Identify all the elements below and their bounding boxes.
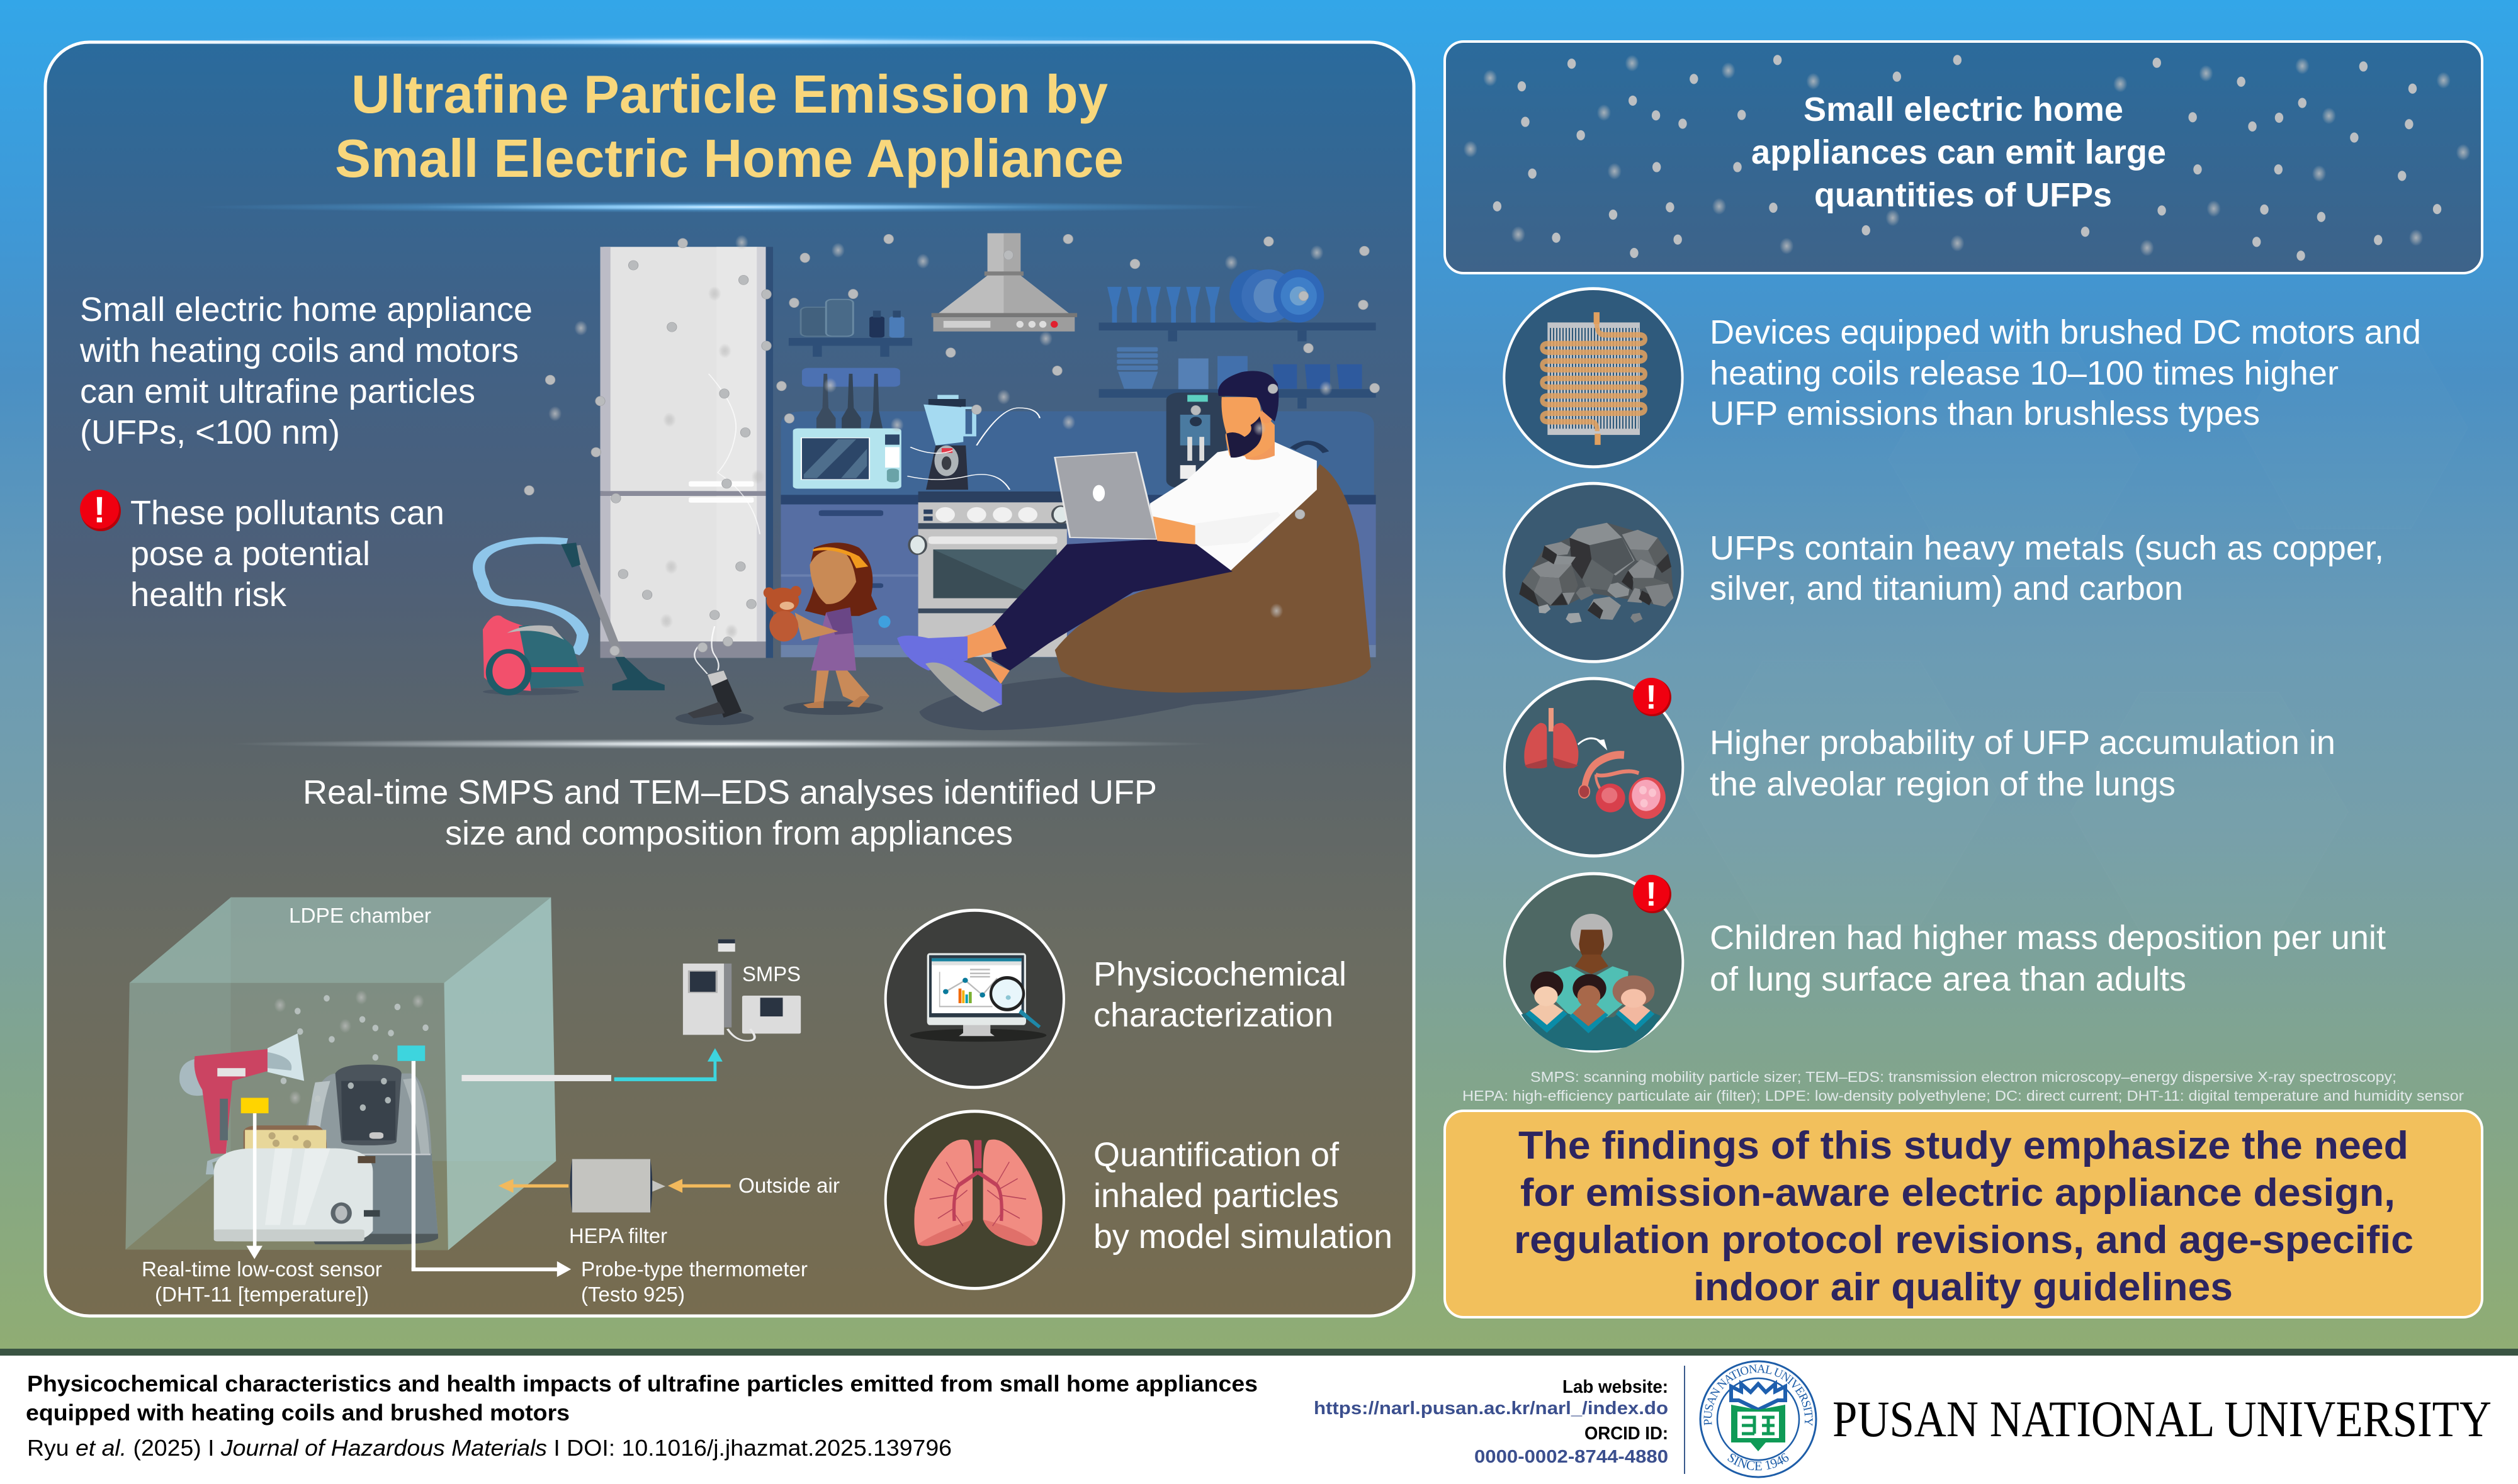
footnote: abbreviations (1462, 1069, 2464, 1104)
footer divider (1684, 1366, 1685, 1474)
stove and oven (909, 492, 1070, 657)
airflow arrows (499, 1179, 731, 1193)
fridge (600, 247, 773, 658)
text block: heavy metals: silver, and titanium) and carbon (1710, 570, 2183, 607)
text block: alveolar accumulation: Higher probability of UFP accumulation in (1710, 724, 2335, 762)
lab links: https://narl.pusan.ac.kr/narl_/index.do (1314, 1398, 1668, 1419)
text block: children deposition: of lung surface area than adults (1710, 960, 2186, 998)
vacuum cleaner (479, 541, 665, 695)
text block: alveolar accumulation: the alveolar region of the lungs (1710, 765, 2176, 803)
text block: heavy metals: UFPs contain heavy metals (such as copper, (1710, 529, 2384, 567)
chamber back and floor (125, 897, 556, 1251)
label: SMPS: SMPS (742, 962, 801, 986)
label: HEPA filter: HEPA filter (569, 1224, 667, 1247)
coffee machine (1166, 393, 1326, 488)
icon: warning on alveolar (1633, 678, 1671, 716)
man on bean bag (897, 371, 1371, 730)
toaster (214, 1149, 380, 1241)
label: LDPE chamber: LDPE chamber (289, 904, 431, 927)
title (335, 65, 1124, 189)
text block: physicochemical characterization: characterization (1093, 996, 1333, 1034)
icon: alveolar lungs (1505, 678, 1683, 856)
icon: children and adults (1505, 874, 1683, 1051)
callout: study findings: regulation protocol revisions, and age-specific (1514, 1218, 2414, 1262)
lab links: ORCID ID: (1584, 1424, 1668, 1444)
panel: small electric home appliances header (1445, 42, 2482, 273)
text block: health risk (130, 494, 444, 614)
text block: appliance description (79, 291, 533, 451)
citation: equipped with heating coils and brushed motors (26, 1400, 570, 1425)
icon: warning (80, 490, 121, 531)
text block: quantification (1093, 1136, 1392, 1256)
text block: appliance description: can emit ultrafine particles (80, 373, 475, 410)
text block: alveolar accumulation (1710, 724, 2335, 803)
icon: heating coil (1504, 289, 1683, 467)
icon: lungs (886, 1111, 1064, 1288)
wine glasses (1107, 287, 1220, 323)
text block: quantification: Quantification of (1093, 1136, 1340, 1174)
footnote: abbreviations: SMPS: scanning mobility particle sizer; TEM–EDS: transmission electron microscopy–energy dispersive X-ray spectroscopy; (1530, 1069, 2397, 1085)
text block: children deposition (1710, 919, 2386, 998)
logo: university seal: PUSAN NATIONAL UNIVERSITY (1703, 1364, 1813, 1426)
bread (244, 1125, 327, 1150)
icon: warning on children (1633, 875, 1671, 913)
SMPS instrument (683, 939, 801, 1041)
microwave (793, 429, 901, 489)
icon: metal particles rocks (1504, 483, 1683, 661)
icon: warning on children: ! (1646, 875, 1657, 913)
label: real-time sensor (142, 1257, 382, 1306)
jars (801, 300, 905, 337)
panel: left main panel (45, 35, 1414, 1316)
text block: appliance description: Small electric home appliance (80, 291, 533, 329)
logo: university seal: SINCE 1946 (1727, 1453, 1789, 1470)
icon: monitor characterization (886, 910, 1064, 1088)
text block: appliance description: (UFPs, <100 nm) (80, 413, 340, 451)
head with beard (1218, 371, 1279, 460)
blurred particles (548, 235, 1333, 639)
text block: analyses (303, 773, 1157, 852)
sampling tube and arrow (461, 1048, 723, 1081)
lab links: 0000-0002-8744-4880 (1474, 1447, 1668, 1467)
yellow sensor and arrow (241, 1098, 269, 1259)
label: probe thermometer: Probe-type thermometer (581, 1257, 808, 1281)
wall shelves (789, 323, 1376, 408)
chamber right wall (444, 897, 556, 1251)
citation: Ryu et al. (2025) I Journal of Hazardous Materials I DOI: 10.1016/j.jhazmat.2025.139796 (27, 1435, 952, 1461)
citation: Physicochemical characteristics and health impacts of ultrafine particles emitted from small home appliances (27, 1371, 1258, 1397)
text block: physicochemical characterization (1093, 955, 1347, 1034)
text block: health risk: health risk (130, 576, 287, 614)
HEPA filter (570, 1159, 665, 1213)
logo: university seal (1700, 1361, 1817, 1478)
header text (1751, 91, 2166, 214)
lower divider glow (230, 739, 1212, 749)
text block: brushed motors: UFP emissions than brushless types (1710, 395, 2260, 432)
text block: heavy metals (1710, 529, 2384, 607)
text block: brushed motors (1710, 313, 2421, 432)
title: Ultrafine Particle Emission by (351, 65, 1108, 125)
illustration: kitchen scene (479, 233, 1379, 730)
girl with teddy bear (764, 542, 883, 715)
text block: analyses: size and composition from appliances (445, 814, 1013, 852)
lab links: Lab website: (1562, 1377, 1668, 1397)
text block: health risk: pose a potential (130, 535, 370, 573)
label: outside air: Outside air (738, 1174, 840, 1197)
footer band (0, 1349, 2518, 1484)
title divider glow (195, 201, 1265, 213)
citation (26, 1371, 1258, 1461)
label: real-time sensor: Real-time low-cost sensor (142, 1257, 382, 1281)
title: Small Electric Home Appliance (335, 129, 1124, 189)
callout: study findings (1445, 1111, 2482, 1317)
text block: brushed motors: Devices equipped with brushed DC motors and (1710, 313, 2421, 351)
label: probe thermometer: (Testo 925) (581, 1283, 685, 1306)
range hood (932, 233, 1077, 332)
text block: physicochemical characterization: Physicochemical (1093, 955, 1347, 993)
hair dryer on the floor (675, 626, 754, 725)
icon: warning on alveolar: ! (1646, 678, 1657, 716)
label: real-time sensor: (DHT-11 [temperature]) (155, 1283, 369, 1306)
back splash (781, 412, 1374, 503)
dishes (1117, 347, 1362, 389)
footnote: abbreviations: HEPA: high-efficiency particulate air (filter); LDPE: low-density polyethylene; DC: direct current; DHT-11: digital temperature and humidity sensor (1462, 1088, 2464, 1104)
callout: study findings: indoor air quality guidelines (1693, 1266, 2233, 1309)
header text: quantities of UFPs (1814, 176, 2112, 214)
text block: health risk: These pollutants can (130, 494, 444, 532)
text block: analyses: Real-time SMPS and TEM–EDS analyses identified UFP (303, 773, 1157, 811)
counter and cabinets (781, 495, 1376, 657)
utensil rack (802, 368, 900, 429)
header text: Small electric home (1804, 91, 2123, 128)
text block: brushed motors: heating coils release 10–100 times higher (1710, 354, 2339, 392)
lab links (1314, 1377, 1668, 1467)
blender (923, 395, 974, 490)
plates (1229, 269, 1324, 323)
cyan probe and arrow (397, 1045, 571, 1277)
chamber particles (274, 991, 429, 1111)
text block: children deposition: Children had higher mass deposition per unit (1710, 919, 2386, 957)
hair dryer (179, 1033, 304, 1174)
blender air currents (907, 408, 1040, 490)
text block: quantification: by model simulation (1093, 1218, 1392, 1256)
diagram: LDPE chamber experimental setup (125, 897, 801, 1277)
callout: study findings: The findings of this study emphasize the need (1518, 1124, 2408, 1167)
text block: appliance description: with heating coils and motors (79, 332, 519, 369)
header text: appliances can emit large (1751, 133, 2166, 171)
text block: quantification: inhaled particles (1093, 1177, 1339, 1215)
label: probe thermometer (581, 1257, 808, 1306)
callout: study findings: for emission-aware electric appliance design, (1520, 1171, 2395, 1215)
right panel particles (1464, 55, 2470, 261)
air fryer (303, 1065, 438, 1244)
floating particles (524, 234, 1379, 656)
icon: warning: ! (93, 490, 106, 531)
